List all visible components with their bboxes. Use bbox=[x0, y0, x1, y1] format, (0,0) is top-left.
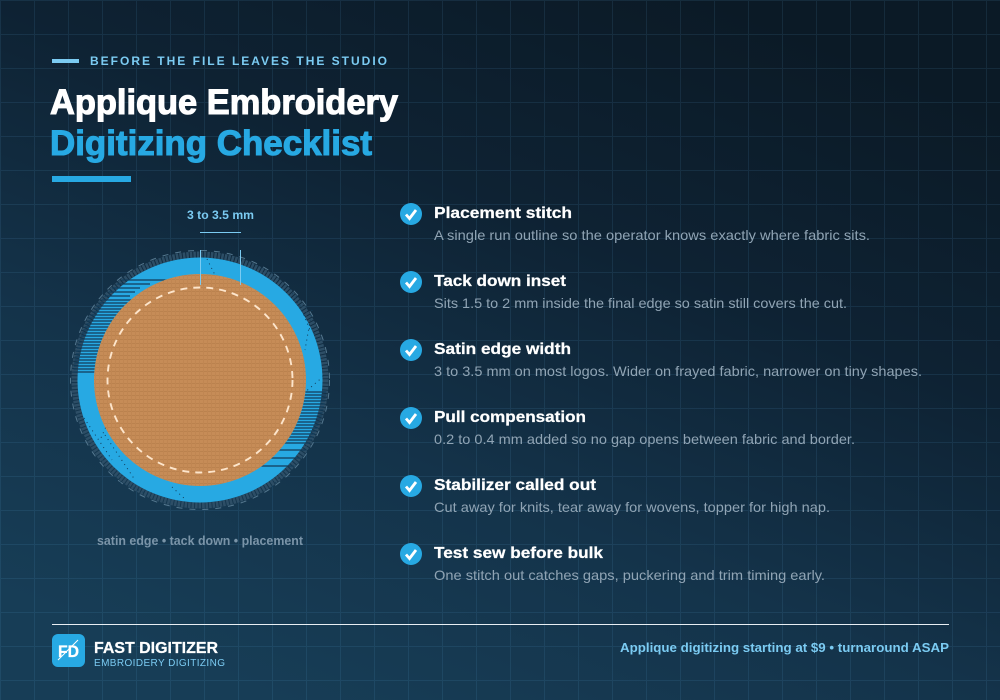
item: test sew before bulk bbox=[400, 543, 825, 583]
item: pull compensation: 0.2 to 0.4 mm added so no gap opens between fabric and border. bbox=[434, 431, 855, 447]
item: placement stitch bbox=[400, 203, 870, 243]
item: pull compensation bbox=[400, 407, 855, 447]
title: Applique Embroidery bbox=[50, 83, 399, 122]
width measure: 3 to 3.5 mm bbox=[187, 210, 254, 222]
footer divider bbox=[52, 624, 949, 625]
item: tack down inset bbox=[400, 271, 847, 311]
footer brand bbox=[94, 640, 225, 669]
title: Digitizing Checklist bbox=[50, 124, 372, 163]
stray stitch specks bbox=[84, 259, 325, 500]
item: stabilizer called out: Cut away for knits, tear away for wovens, topper for high nap. bbox=[434, 499, 830, 515]
item: tack down inset: Sits 1.5 to 2 mm inside the final edge so satin still covers the cut. bbox=[434, 295, 847, 311]
applique diagram bbox=[70, 210, 330, 510]
footer brand: FAST DIGITIZER bbox=[94, 640, 218, 657]
satin edge bbox=[78, 258, 322, 502]
footer offer: Applique digitizing starting at $9 • turnaround ASAP bbox=[620, 640, 949, 655]
width measure bbox=[187, 210, 254, 285]
item: satin edge width bbox=[400, 339, 922, 379]
eyebrow: BEFORE THE FILE LEAVES THE STUDIO bbox=[90, 54, 387, 68]
title bbox=[50, 83, 399, 163]
footer logo bbox=[52, 634, 85, 667]
diagram caption: satin edge • tack down • placement bbox=[97, 533, 304, 548]
item: placement stitch: A single run outline so the operator knows exactly where fabric sits. bbox=[434, 227, 870, 243]
title underline bbox=[52, 176, 131, 182]
item: satin edge width: Satin edge width bbox=[434, 341, 571, 358]
item: pull compensation: Pull compensation bbox=[434, 409, 586, 426]
dense satin stitches bbox=[70, 280, 330, 466]
item: test sew before bulk: Test sew before bulk bbox=[434, 545, 603, 562]
fabric bbox=[94, 274, 306, 486]
checklist bbox=[400, 203, 922, 583]
item: stabilizer called out: Stabilizer called out bbox=[434, 477, 597, 494]
item: placement stitch: Placement stitch bbox=[434, 205, 572, 222]
footer logo: FD bbox=[58, 642, 79, 661]
footer brand: EMBROIDERY DIGITIZING bbox=[94, 658, 225, 669]
tack down stitch bbox=[108, 288, 292, 472]
item: satin edge width: 3 to 3.5 mm on most logos. Wider on frayed fabric, narrower on tiny shapes. bbox=[434, 363, 922, 379]
item: tack down inset: Tack down inset bbox=[434, 273, 567, 290]
item: test sew before bulk: One stitch out catches gaps, puckering and trim timing early. bbox=[434, 567, 825, 583]
outer satin stitch teeth bbox=[70, 250, 330, 510]
item: stabilizer called out bbox=[400, 475, 830, 515]
